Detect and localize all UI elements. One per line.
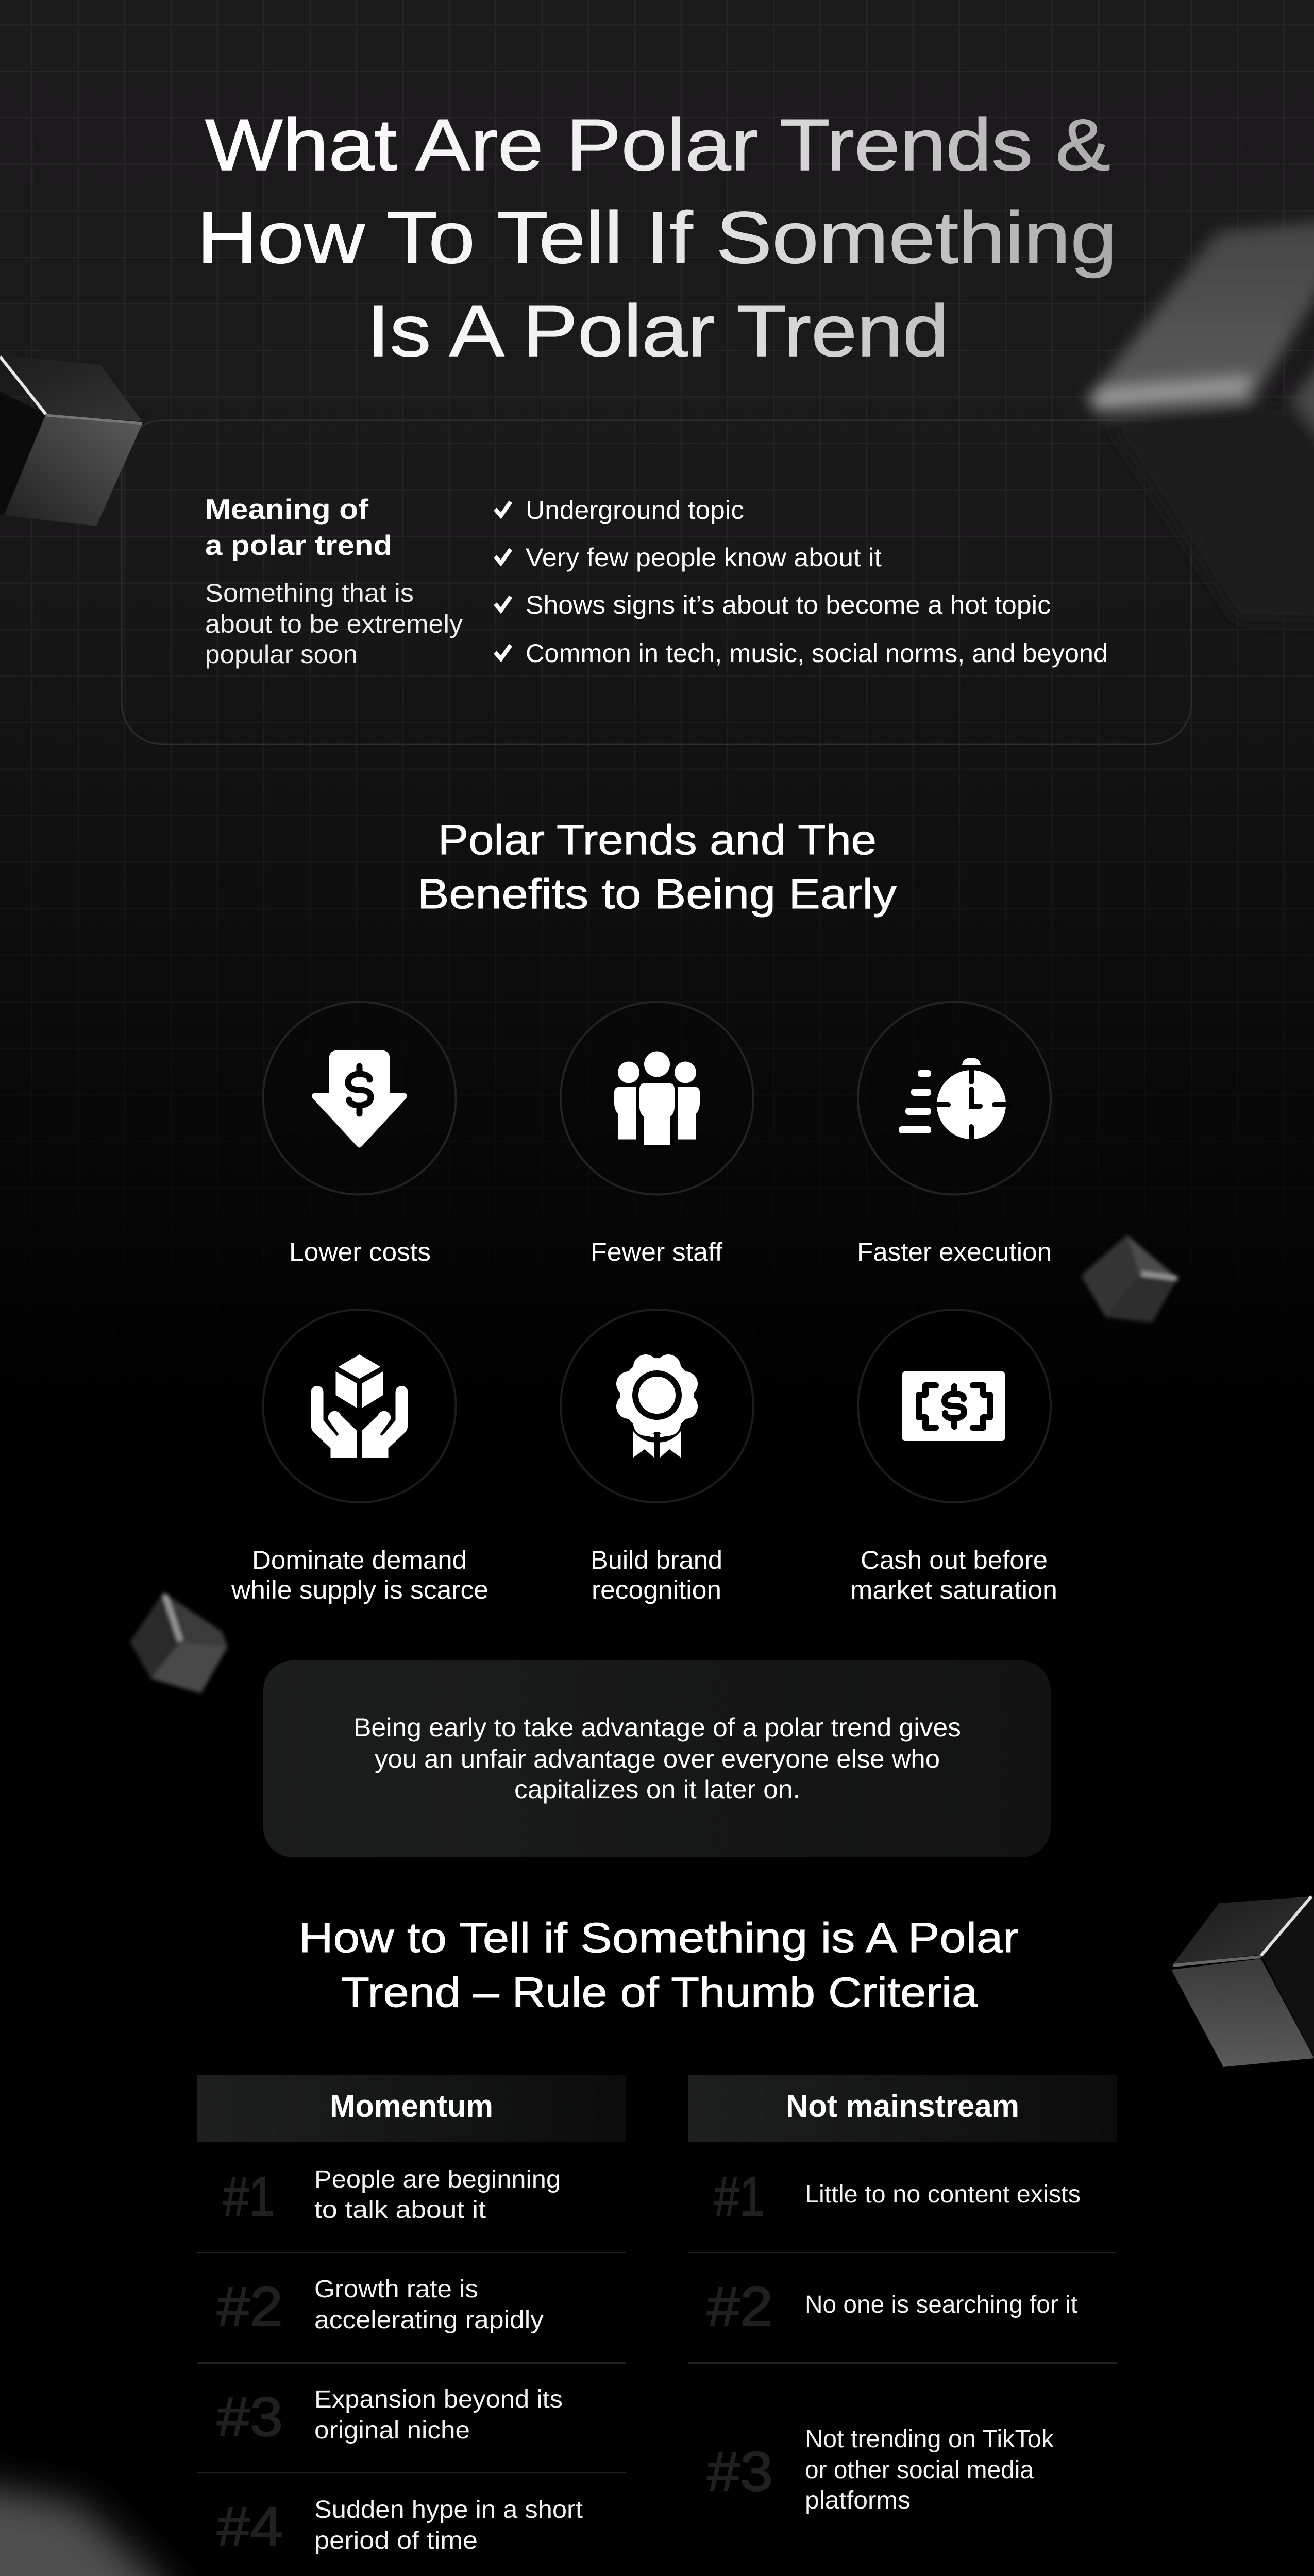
row 2: Growth rate is: [314, 2276, 478, 2303]
icon: hands holding cube: [263, 1310, 456, 1502]
panel: meaning of a polar trend: [122, 420, 1191, 744]
heading: benefits: Benefits to Being Early: [417, 871, 897, 918]
checklist: traits: Shows signs it’s about to become a hot topic: [526, 590, 1051, 619]
decoration: cube top left: [0, 355, 142, 526]
label: Cash out before: [861, 1546, 1048, 1574]
header: momentum: Momentum: [330, 2089, 493, 2124]
label: Lower costs: [289, 1238, 431, 1266]
table: not mainstream: [688, 2075, 1117, 2576]
label: while supply is scarce: [231, 1575, 488, 1604]
row 2: No one is searching for it: [805, 2291, 1077, 2318]
heading: benefits: Polar Trends and The: [438, 817, 877, 863]
row 3: or other social media: [805, 2456, 1034, 2484]
row 2: [217, 2275, 544, 2337]
heading: rule of thumb criteria: [299, 1914, 1019, 2016]
row 1: People are beginning: [314, 2166, 561, 2193]
header: not mainstream: [688, 2075, 1117, 2142]
decoration: small cube right: [1081, 1235, 1177, 1323]
item: dominate demand: [231, 1310, 488, 1604]
text: definition: Something that is: [205, 579, 414, 607]
title: Is A Polar Trend: [367, 290, 949, 372]
row 1: #1: [714, 2165, 765, 2227]
icon: banknote: [858, 1310, 1051, 1502]
item: fewer staff: [561, 1002, 753, 1266]
item: build brand recognition: [561, 1310, 753, 1604]
row 2: #2: [707, 2275, 773, 2337]
row 2: accelerating rapidly: [314, 2307, 544, 2334]
title: What Are Polar Trends &: [205, 104, 1110, 186]
decoration: cube right: [1171, 1896, 1314, 2067]
row 2: #2: [217, 2275, 283, 2337]
row 1: [714, 2165, 1081, 2227]
table: momentum: [197, 2075, 626, 2576]
icon: rosette badge: [561, 1310, 753, 1502]
row 3: #3: [217, 2385, 283, 2448]
row 4: Sudden hype in a short: [314, 2496, 583, 2523]
callout: unfair advantage: Being early to take advantage of a polar trend gives: [353, 1713, 961, 1742]
header: not mainstream: Not mainstream: [786, 2089, 1019, 2124]
label: market saturation: [850, 1575, 1057, 1604]
decoration: blurred cube top right: [1084, 219, 1314, 623]
heading: rule of thumb criteria: Trend – Rule of Thumb Criteria: [341, 1969, 978, 2016]
label: Fewer staff: [591, 1238, 722, 1266]
row 2: [707, 2275, 1077, 2337]
heading: rule of thumb criteria: How to Tell if Something is A Polar: [299, 1914, 1019, 1961]
row 3: platforms: [805, 2487, 911, 2514]
callout: unfair advantage: you an unfair advantage over everyone else who: [375, 1744, 940, 1773]
row 1: Little to no content exists: [805, 2181, 1081, 2208]
row 4: #4: [217, 2495, 283, 2557]
row 3: original niche: [314, 2417, 470, 2444]
checklist: traits: Very few people know about it: [526, 543, 882, 572]
item: faster execution: [857, 1002, 1052, 1266]
callout: unfair advantage: [263, 1660, 1051, 1857]
checklist: traits: Underground topic: [526, 496, 744, 524]
decoration: blurred cube left: [0, 2481, 224, 2576]
text: definition: popular soon: [205, 640, 358, 669]
icon: people: [561, 1002, 753, 1194]
heading: meaning of a polar trend: [205, 493, 392, 561]
row 3: Not trending on TikTok: [805, 2426, 1054, 2453]
header: momentum: [197, 2075, 626, 2142]
row 3: [707, 2426, 1054, 2514]
heading: meaning of a polar trend: a polar trend: [205, 529, 392, 561]
label: Faster execution: [857, 1238, 1052, 1266]
row 1: [223, 2165, 561, 2227]
checklist: traits: Common in tech, music, social norms, and beyond: [526, 639, 1108, 668]
icon: stopwatch: [858, 1002, 1051, 1194]
row 4: [217, 2495, 583, 2557]
row 1: to talk about it: [314, 2196, 486, 2224]
row 3: Expansion beyond its: [314, 2386, 563, 2413]
label: Dominate demand: [252, 1546, 467, 1574]
checklist: traits: [495, 496, 1108, 668]
heading: meaning of a polar trend: Meaning of: [205, 493, 369, 525]
item: lower costs: [263, 1002, 456, 1266]
label: recognition: [592, 1575, 721, 1604]
decoration: small cube left: [130, 1592, 228, 1693]
callout: unfair advantage: capitalizes on it later on.: [514, 1775, 800, 1804]
label: [850, 1546, 1057, 1604]
text: definition: about to be extremely: [205, 609, 463, 638]
row 1: #1: [223, 2165, 275, 2227]
label: Build brand: [591, 1546, 722, 1574]
row 3: [217, 2385, 563, 2448]
heading: benefits: [417, 817, 897, 918]
row 3: #3: [707, 2440, 773, 2502]
icon: price down arrow: [263, 1002, 456, 1194]
label: [591, 1546, 722, 1604]
row 4: period of time: [314, 2527, 478, 2554]
label: [231, 1546, 488, 1604]
item: cash out: [850, 1310, 1057, 1604]
text: definition: [205, 579, 463, 669]
title: How To Tell If Something: [197, 197, 1117, 279]
title: [197, 104, 1117, 372]
